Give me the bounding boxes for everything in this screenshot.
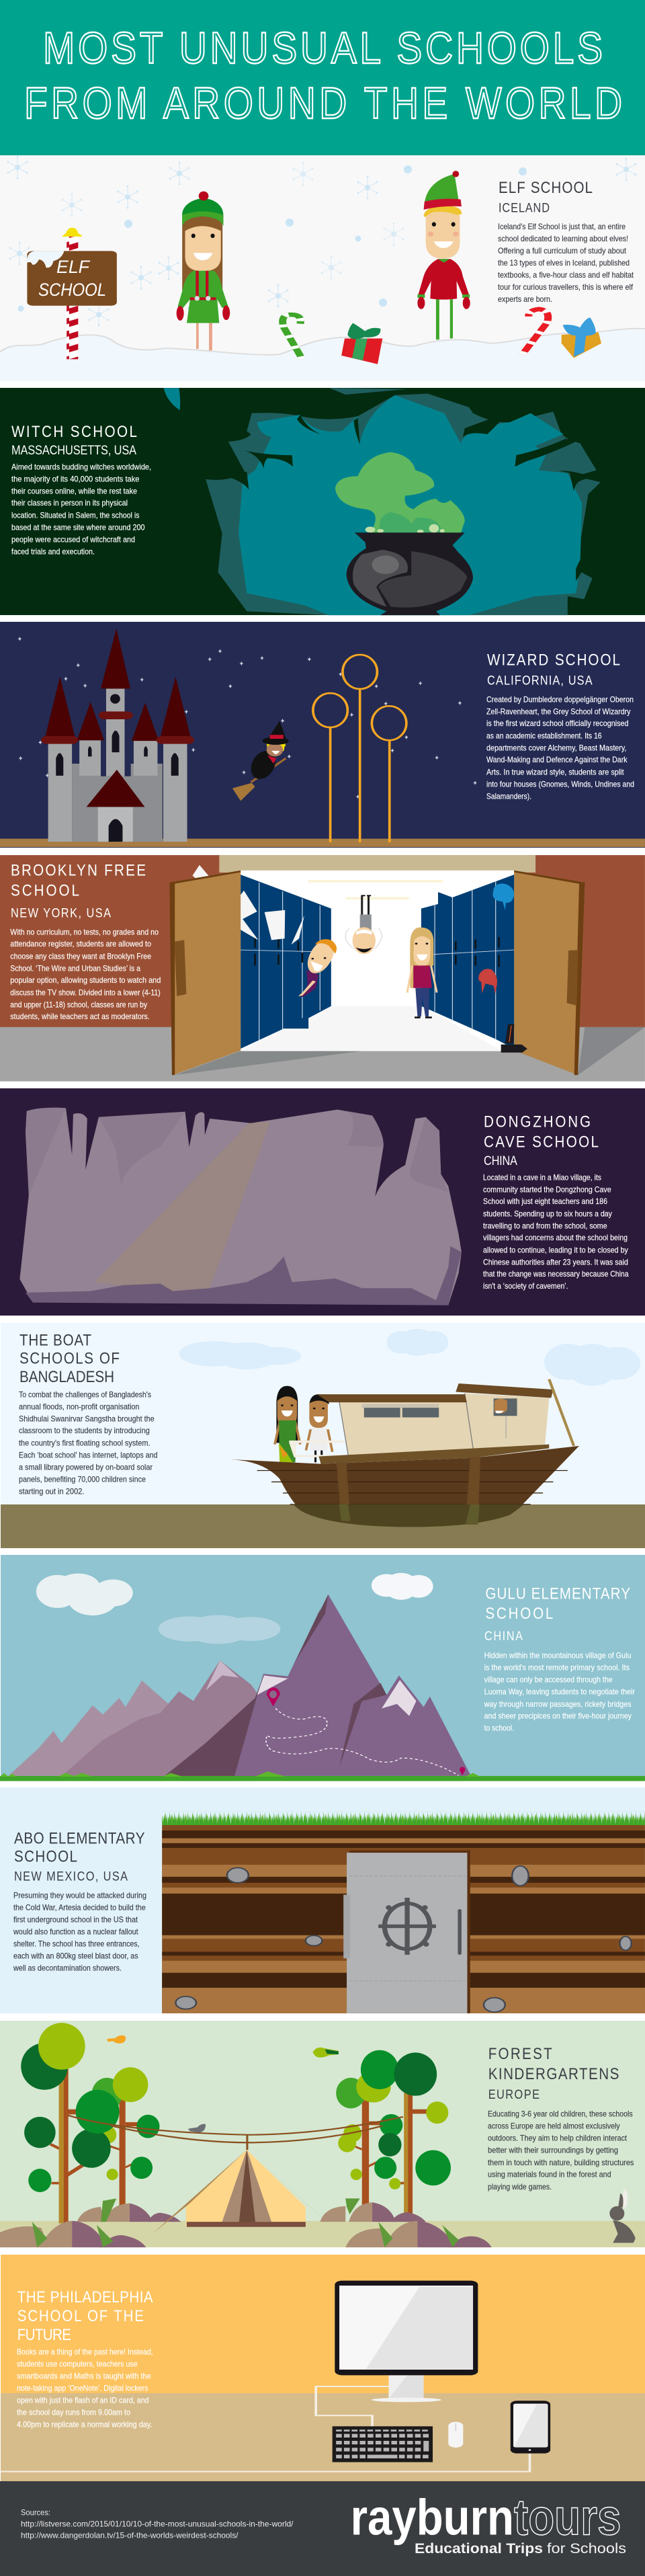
panel: title header [0, 0, 645, 155]
text block: witch school: their courses online, while the rest take [11, 486, 137, 495]
character: witch on broom [232, 721, 289, 801]
panel: elf school [0, 155, 645, 381]
heading: witch school: WITCH SCHOOL [11, 423, 137, 440]
text block: brooklyn: discuss the TV show. Divided into a lower (4-11) [10, 988, 161, 998]
illustration: soil layers [162, 1825, 645, 2013]
illustration: cave rock [19, 1108, 462, 1305]
logo: rayburn tours: rayburn [351, 2489, 514, 2546]
heading: brooklyn free school: SCHOOL [11, 881, 79, 899]
title [24, 24, 622, 128]
text block: brooklyn: attendance register, students are allowed to [10, 939, 151, 949]
heading: the boat schools of bangladesh: SCHOOLS OF [19, 1349, 120, 1367]
text block: wizard school: Wand-Making and Defence Against the Dark [486, 755, 628, 764]
sources: Sources: [21, 2508, 50, 2518]
text block: boat schools: classroom to the students by introducing [19, 1426, 150, 1435]
text block: elf school: experts are born. [498, 294, 552, 304]
text block: cave school: villagers had concerns about the school being [483, 1233, 628, 1242]
icon: red gift [341, 323, 382, 364]
panel: witch school [0, 388, 645, 615]
character: girl with blonde hair [407, 928, 437, 1018]
text block: brooklyn: With no curriculum, no tests, no grades and no [10, 927, 159, 936]
text block: wizard school: Salamanders). [486, 791, 531, 801]
text block: brooklyn: School. ‘The Wire and Urban Studies’ is a [10, 963, 140, 973]
text block: cave school: isn't a ‘society of cavemen’. [483, 1281, 568, 1291]
rocks [175, 1866, 632, 2012]
text block: philadelphia: note-taking app ‘OneNote’. Digital lockers [17, 2384, 148, 2393]
text block: elf school [498, 222, 634, 304]
icon: spray can [501, 1024, 527, 1053]
text block: philadelphia [17, 2347, 153, 2429]
heading: the boat schools of bangladesh [19, 1331, 120, 1386]
text block: abo: the Cold War, Artesia decided to build the [13, 1902, 146, 1912]
text block: boat schools: panels, benefiting 70,000 children since [19, 1474, 146, 1484]
stars [17, 637, 477, 799]
icon: rabbit [609, 2189, 636, 2243]
text block: wizard school: as an academic establishment. Its 16 [486, 731, 602, 741]
panel: brooklyn free school [0, 855, 645, 1082]
text block: cave school [483, 1172, 629, 1291]
panel: gulu elementary school [0, 1555, 645, 1781]
icon: cauldron [346, 532, 473, 615]
text block: abo: first underground school in the US that [13, 1915, 138, 1925]
sign text [38, 257, 106, 300]
back rocks [77, 2198, 426, 2222]
heading: abo elementary school: ABO ELEMENTARY [14, 1829, 145, 1847]
clouds [36, 1573, 433, 1644]
heading: elf school: ELF SCHOOL [499, 179, 593, 196]
text block: forest [488, 2109, 634, 2191]
subheading: china: CHINA [484, 1629, 523, 1643]
text block: witch school: the majority of its 40,000 students take [11, 474, 140, 483]
character: upside-down boy [345, 895, 382, 954]
text block: gulu: village can only be accessed through the [484, 1675, 613, 1685]
subheading: iceland: ICELAND [499, 200, 550, 215]
icon: red candy cane [522, 309, 548, 354]
text block: witch school [11, 462, 151, 556]
text block: philadelphia: students use computers, teachers use [17, 2360, 138, 2369]
text block: cave school: Chinese authorities after 23 years. It was said [483, 1257, 628, 1266]
doors [169, 871, 645, 1075]
text block: boat schools: the country's first floating school system. [19, 1438, 150, 1447]
panel: footer [0, 2481, 645, 2576]
logo: rayburn tours [351, 2489, 626, 2557]
text block: cave school: Located in a cave in a Miao village, its [483, 1172, 601, 1182]
icon: flying papers [193, 865, 304, 944]
foreground rocks [0, 2221, 492, 2247]
text block: forest: playing wide games. [488, 2182, 552, 2191]
panel: abo elementary school [0, 1787, 645, 2013]
route and pins [266, 1687, 465, 1775]
logo: rayburn tours: tours [514, 2489, 621, 2546]
text block: brooklyn: choose any class they want at Brooklyn Free [10, 952, 151, 961]
text block: wizard school: Zell-Ravenheart, the Grey School of Wizardry [486, 707, 630, 716]
icon: boat [230, 1379, 579, 1527]
character: leaning boy [298, 937, 339, 997]
text block: forest: using materials found in the forest and [488, 2170, 611, 2179]
text block: witch school: based at the same site where around 200 [11, 522, 145, 532]
text block: gulu: to school. [484, 1724, 514, 1733]
text block: boat schools: a small library powered by on-board solar [19, 1463, 153, 1472]
text block: elf school: Iceland's Elf School is just that, an entire [498, 222, 626, 231]
icon: mountains [8, 1595, 471, 1776]
icon: keyboard [333, 2426, 433, 2462]
heading: dongzhong cave school: DONGZHONG [484, 1113, 591, 1131]
icon: graffiti splats [478, 883, 514, 994]
text block: philadelphia: smartboards and Maths is taught with the [17, 2372, 151, 2381]
panel: forest kindergartens [0, 2021, 645, 2247]
icon: blue gift [562, 318, 601, 358]
text block: philadelphia: open with just the flash of an ID card, and [17, 2396, 149, 2405]
sign text: ELF [56, 257, 90, 277]
text block: philadelphia: Books are a thing of the past here! Instead, [17, 2347, 153, 2357]
panel: dongzhong cave school [0, 1088, 645, 1316]
text block: cave school: School with just eight teachers and 186 [483, 1197, 607, 1206]
text block: gulu: is the world's most remote primary school. Its [484, 1662, 630, 1672]
heading: forest kindergartens: FOREST [488, 2045, 552, 2062]
subheading: new york: NEW YORK, USA [11, 905, 111, 920]
icon: quidditch hoops [313, 655, 406, 842]
text block: elf school: Offering a full curriculum of study about [498, 246, 627, 255]
heading: wizard school: WIZARD SCHOOL [487, 651, 620, 669]
text block: wizard school [486, 695, 634, 801]
subheading: new mexico: NEW MEXICO, USA [14, 1869, 128, 1884]
heading: forest kindergartens [488, 2045, 619, 2083]
heading: brooklyn free school: BROOKLYN FREE [11, 861, 146, 879]
sign text: SCHOOL [38, 280, 106, 300]
logo: rayburn tours: for Schools [547, 2541, 626, 2557]
heading: gulu elementary school [485, 1584, 630, 1622]
snowflakes [7, 156, 636, 326]
text block: boat schools: To combat the challenges of Bangladesh's [19, 1390, 151, 1400]
text block: abo: would also function as a nuclear fallout [13, 1927, 138, 1936]
icon: tent [153, 2150, 340, 2234]
heading: the philadelphia school of the future: SCHOOL OF THE [17, 2307, 144, 2325]
icon: desktop monitor [335, 2281, 478, 2402]
heading: the boat schools of bangladesh: THE BOAT [19, 1331, 91, 1349]
heading: abo elementary school: SCHOOL [14, 1847, 77, 1865]
clouds [179, 1329, 640, 1386]
heading: the philadelphia school of the future: THE PHILADELPHIA [17, 2288, 153, 2306]
text block: boat schools: Each ‘boat school’ has internet, laptops and [19, 1450, 157, 1459]
text block: elf school: tour for curious travellers, this is where elf [498, 282, 634, 292]
text block: witch school: people were accused of witchcraft and [11, 535, 135, 545]
text block: cave school: community started the Dongzhong Cave [483, 1184, 611, 1194]
text block: abo: well as decontamination showers. [13, 1963, 122, 1972]
grass [0, 1771, 645, 1781]
icon: green candy cane [283, 315, 302, 359]
panel: boat schools of bangladesh [1, 1323, 645, 1548]
icon: mouse [448, 2422, 463, 2448]
sources: http://www.dangerdolan.tv/15-of-the-worlds-weirdest-schools/ [21, 2530, 239, 2540]
subheading: massachusetts: MASSACHUSETTS, USA [11, 443, 136, 457]
title: MOST UNUSUAL SCHOOLS [43, 24, 603, 73]
text block: elf school: the 13 types of elves in Iceland, published [498, 258, 630, 268]
text block: brooklyn [10, 927, 161, 1021]
text block: elf school: school dedicated to learning about elves! [498, 234, 628, 243]
heading: gulu elementary school: GULU ELEMENTARY [485, 1584, 630, 1603]
text block: witch school: Aimed towards budding witches worldwide, [11, 462, 151, 472]
panel: philadelphia school of the future [0, 2255, 645, 2481]
icon: castle [41, 629, 194, 842]
sources [21, 2508, 294, 2540]
text block: wizard school: is the first wizard school officially recognised [486, 719, 629, 728]
character: boy elf [417, 171, 470, 339]
text block: gulu: Hidden within the mountainous village of Gulu [484, 1651, 632, 1660]
text block: boat schools: starting out in 2002. [19, 1486, 85, 1496]
birds [107, 2036, 339, 2132]
grass [162, 1811, 645, 1825]
text block: abo: each with an 800kg steel blast door, as [13, 1951, 138, 1961]
sources: http://listverse.com/2015/01/10/10-of-the-most-unusual-schools-in-the-world/ [21, 2519, 294, 2528]
text block: philadelphia: 4.00pm to replicate a normal working day. [17, 2420, 152, 2429]
cave forest background [164, 388, 606, 615]
heading: brooklyn free school [11, 861, 146, 899]
subheading: china: CHINA [484, 1154, 517, 1168]
green potion smoke [335, 452, 465, 533]
heading: abo elementary school [14, 1829, 145, 1865]
text block: forest: across Europe are held almost exclusively [488, 2121, 620, 2130]
text block: boat schools: annual floods, non-profit organisation [19, 1402, 140, 1411]
subheading: california: CALIFORNIA, USA [487, 673, 593, 688]
text block: witch school: faced trials and execution. [11, 547, 95, 556]
heading: dongzhong cave school [484, 1113, 599, 1151]
text block: forest: them in touch with nature, building structures [488, 2158, 634, 2167]
text block: brooklyn: and upper (11-18) school, classes are run by [10, 1000, 147, 1009]
character: girl in sari [275, 1386, 300, 1462]
text block: boat schools: Shidhulai Swanirvar Sangstha brought the [19, 1414, 155, 1423]
school corridor [241, 871, 514, 1051]
text block: wizard school: Arts. In true wizard style, students are split [486, 768, 624, 777]
heading: forest kindergartens: KINDERGARTENS [488, 2065, 619, 2083]
icon: right trees [336, 2050, 451, 2222]
text block: abo [13, 1890, 146, 1972]
text block: gulu [484, 1651, 635, 1733]
heading: the boat schools of bangladesh: BANGLADESH [19, 1368, 114, 1386]
logo: rayburn tours: Educational Trips [415, 2541, 543, 2557]
panel: wizard school [0, 622, 645, 848]
icon: left trees [21, 2023, 160, 2223]
snow ground [0, 329, 645, 381]
ropes [68, 2116, 403, 2150]
heading: gulu elementary school: SCHOOL [485, 1605, 553, 1622]
cables [0, 2386, 530, 2472]
character: girl elf [177, 192, 230, 350]
text block: abo: Presuming they would be attacked during [13, 1890, 146, 1900]
text block: cave school: students. Spending up to six hours a day [483, 1209, 612, 1218]
text block: boat schools [19, 1390, 157, 1496]
icon: elf school signpost [27, 228, 117, 359]
character: boy in white shirt [306, 1394, 333, 1462]
text block: brooklyn: popular option, allowing students to watch and [10, 975, 161, 985]
heading: dongzhong cave school: CAVE SCHOOL [484, 1133, 599, 1151]
subheading: europe: EUROPE [488, 2087, 540, 2101]
text block: gulu: way through narrow passages, rickety bridges [484, 1699, 632, 1709]
heading: the philadelphia school of the future [17, 2288, 153, 2343]
text block: witch school: their classes in person in its physical [11, 498, 128, 508]
text block: witch school: location. Situated in Salem, the school is [11, 510, 140, 520]
text block: wizard school: departments cover Alchemy, Beast Mastery, [486, 743, 626, 752]
text block: forest: outdoors. They aim to help children interact [488, 2134, 628, 2143]
text block: elf school: textbooks, a five-hour class and elf habitat [498, 270, 634, 280]
title: FROM AROUND THE WORLD [24, 79, 622, 128]
icon: tablet [511, 2401, 550, 2454]
text block: forest: better with their surroundings by getting [488, 2146, 618, 2155]
text block: philadelphia: the school day runs from 9.00am to [17, 2408, 130, 2417]
text block: abo: shelter. The school has three entrances, [13, 1939, 140, 1948]
text block: cave school: travelling to and from the school, some [483, 1221, 607, 1230]
icon: blast door [343, 1850, 470, 2013]
text block: brooklyn: students, while teachers act as moderators. [10, 1012, 150, 1021]
heading: the philadelphia school of the future: FUTURE [17, 2326, 71, 2343]
text block: cave school: allowed to continue, leading it to be closed by [483, 1245, 628, 1254]
